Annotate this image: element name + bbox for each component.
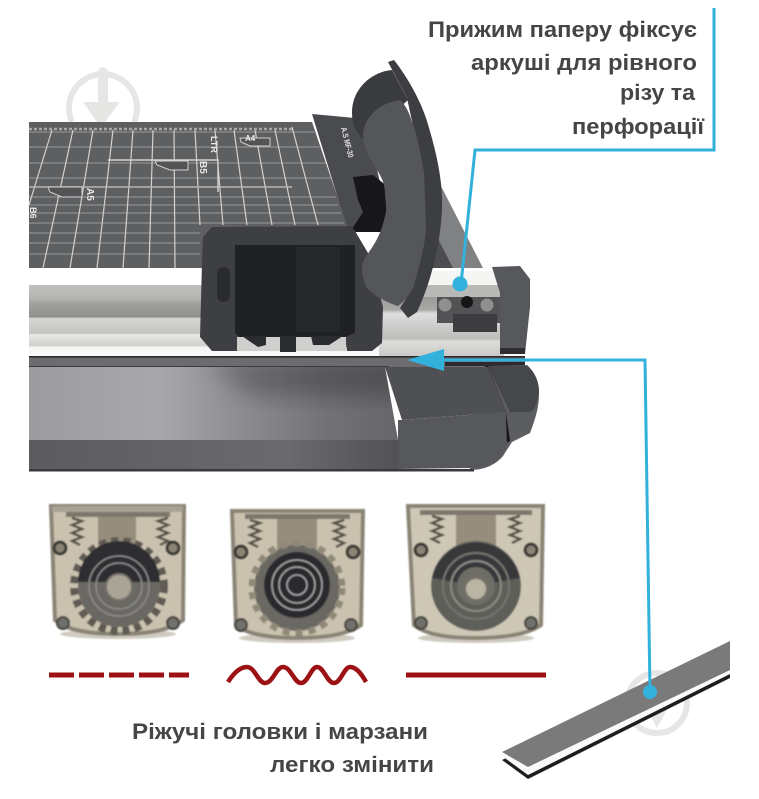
paper mat with grid: B5 [197,161,208,174]
front block [385,367,506,420]
rail white top near end [420,271,500,297]
cutting carriage [200,226,383,352]
watermark: top left logo [69,72,137,122]
heading: paper clamp description: аркуші для рівного [471,50,697,75]
lever back cam [352,70,408,140]
aluminium rail [29,285,379,356]
heading: paper clamp description: різу та [620,80,696,105]
heading: paper clamp description: перфорації [572,114,705,139]
cartridge: straight blade [408,506,543,643]
cutter base [28,114,539,472]
cut sample: dashed line [49,672,189,678]
shadow band under rail [29,356,525,367]
caption: interchangeable heads: Ріжучі головки і марзани [132,719,428,744]
heading: paper clamp description [428,17,705,139]
cut sample: wavy line [228,667,366,683]
caption: interchangeable heads [132,719,434,777]
blade strip illustration [502,641,730,779]
cut sample: straight line [406,672,546,678]
lever front grip [362,100,426,306]
slot shadow by strip [350,175,392,232]
groove between block and base [485,366,510,443]
right base rounded corner [470,365,539,470]
callout: arrow to blade strip [407,349,657,699]
caption: interchangeable heads: легко змінити [270,752,434,777]
front table panel [29,367,398,440]
label strip with model name [312,114,390,228]
paper mat with grid: B6 [28,207,38,219]
watermark: bottom right logo [627,673,687,733]
screws bracket [437,296,500,332]
lever outer plate [388,60,442,318]
paper mat with grid [28,122,347,268]
paper mat with grid: A5 [84,188,95,201]
cartridge: perforation blade [51,506,184,639]
right rail end cap [492,266,530,354]
pressure lever [352,60,442,318]
cartridge: wave blade [232,511,363,643]
label strip with model name: A.S MF-30 [339,126,355,159]
paper mat with grid: LTR [209,136,219,153]
heading: paper clamp description: Прижим паперу фіксує [428,17,697,42]
paper mat with grid: A4 [245,134,256,143]
back plate right of lever [420,172,483,268]
callout: connector to paper clamp [452,8,714,292]
